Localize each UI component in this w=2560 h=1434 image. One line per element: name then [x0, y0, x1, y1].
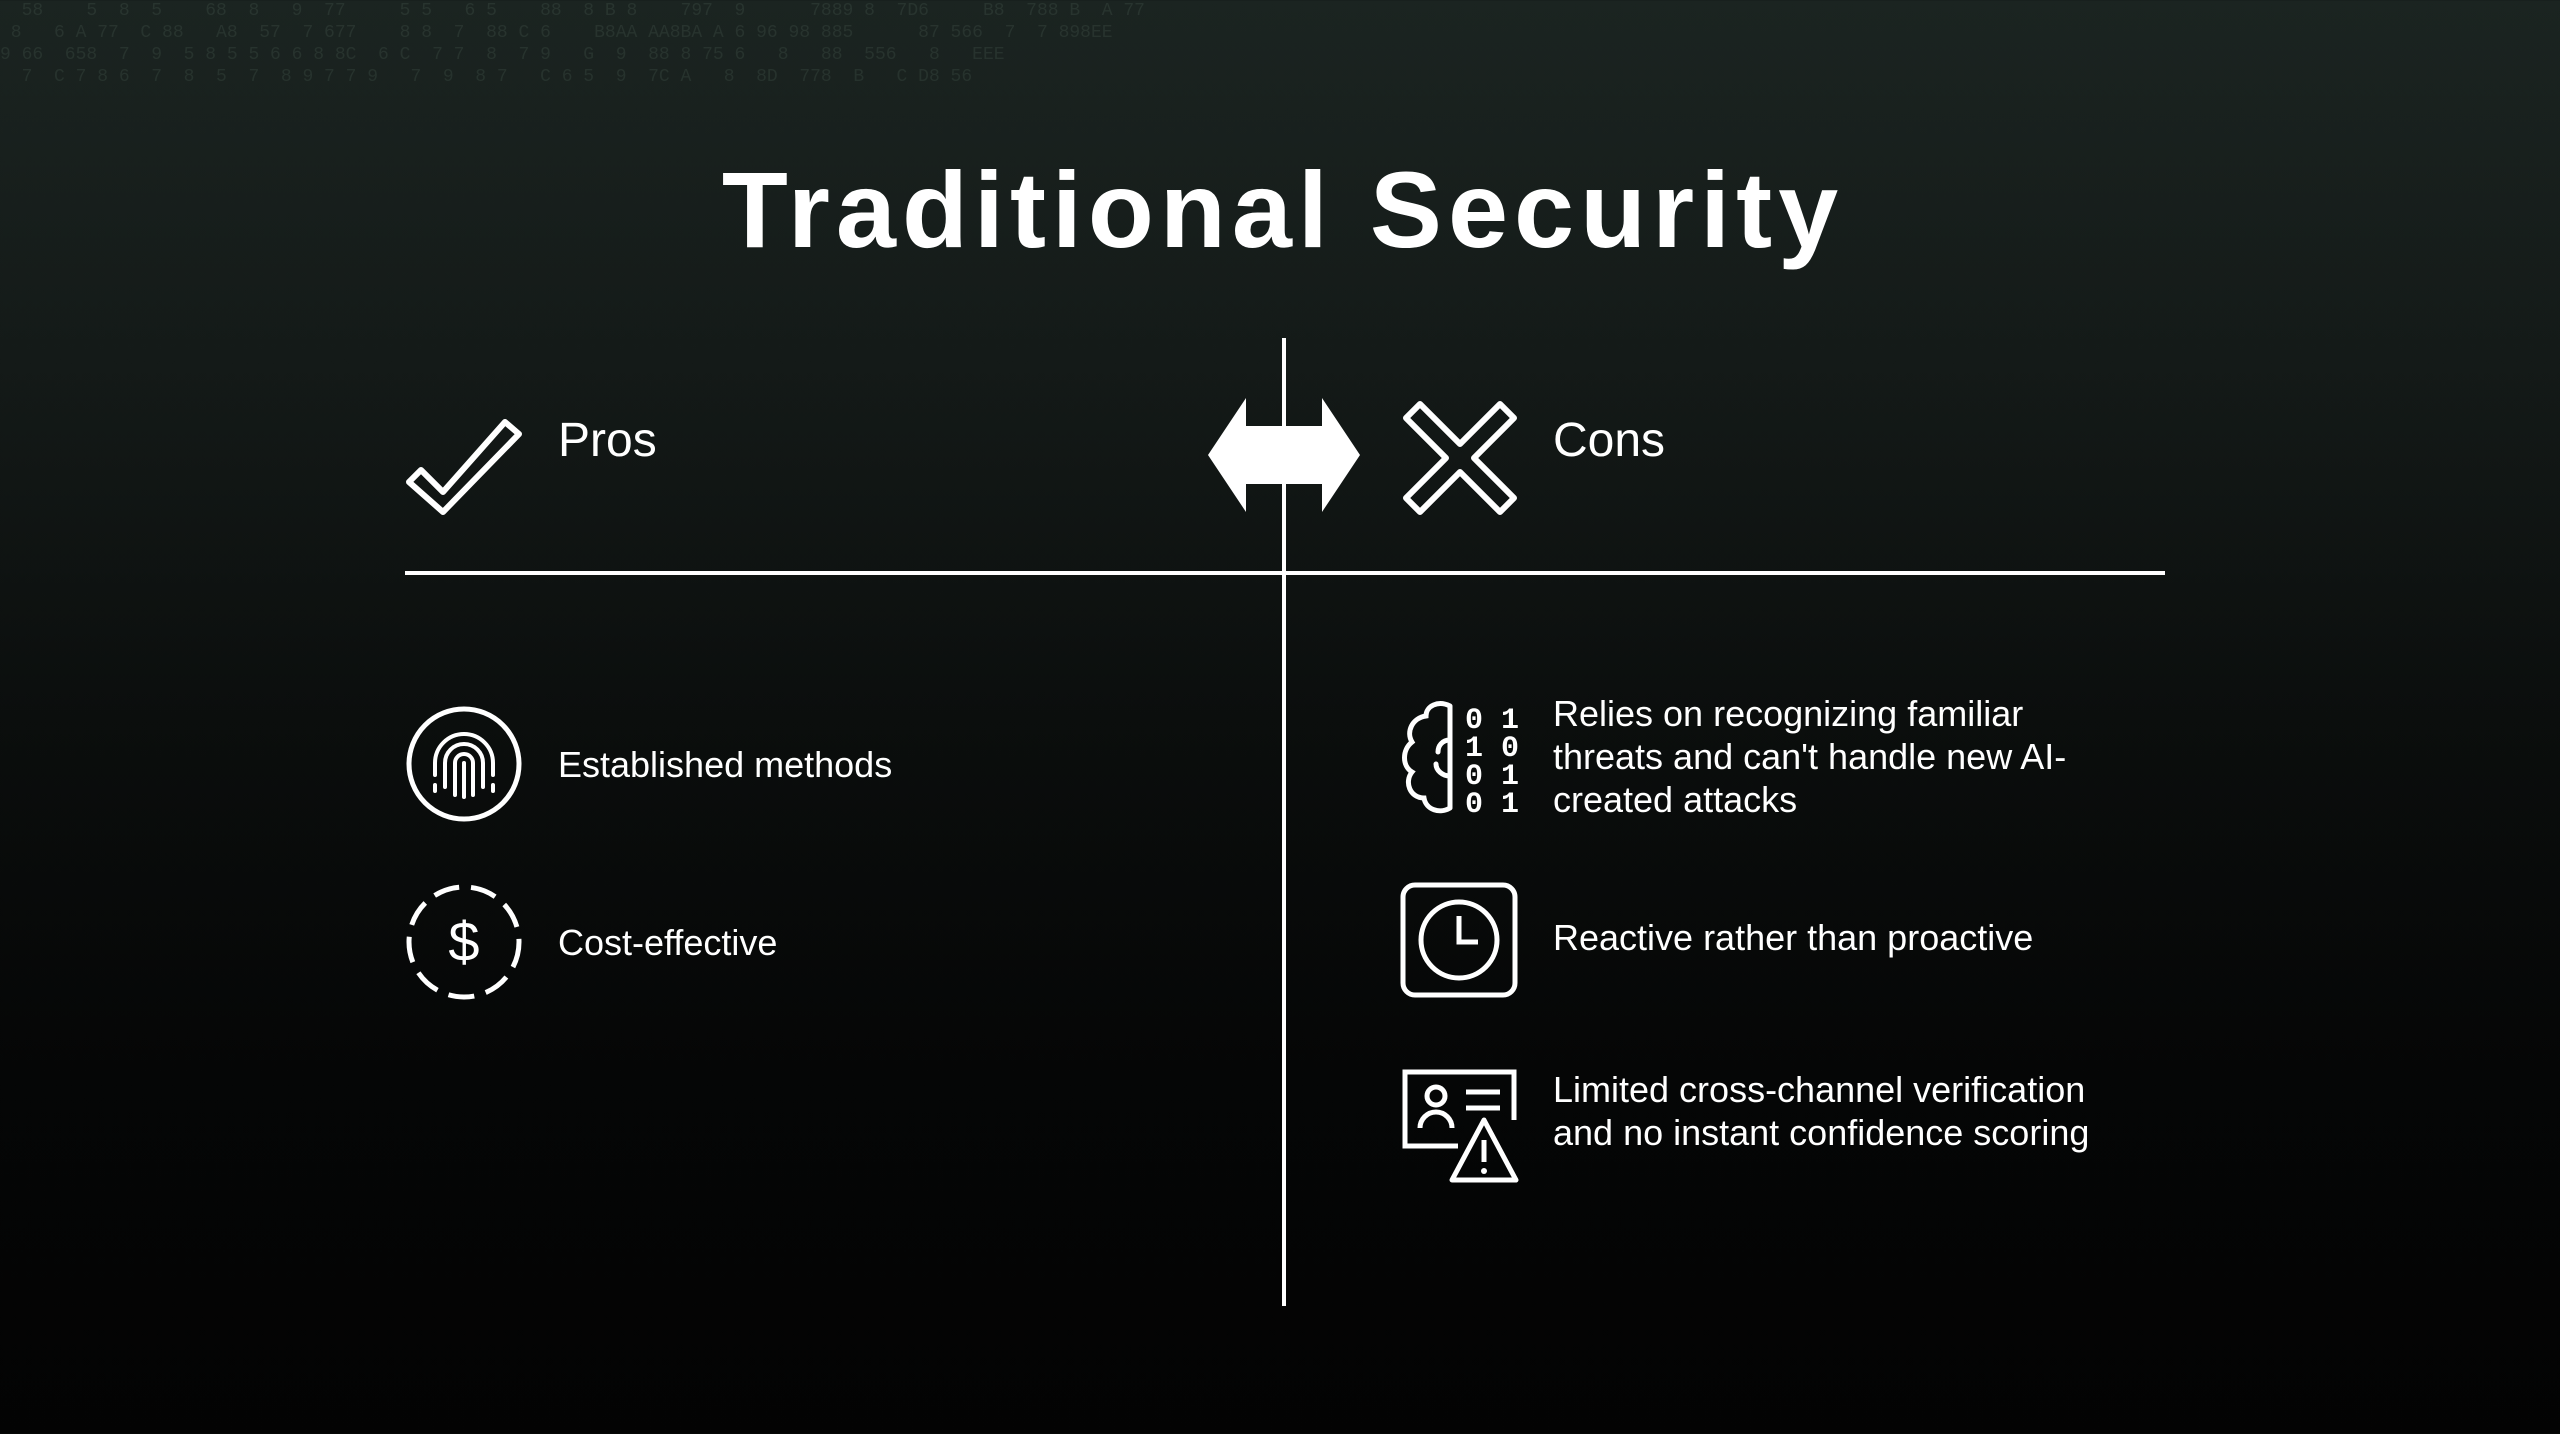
pro item: cost-effective [406, 884, 777, 1000]
text: 58 5 8 5 68 8 9 77 5 5 6 5 88 8 B 8 797 9 7889 8 7D6 B8 788 B A 77 8 6 A 77 C 88 A8 57 7 677 8 8 7 88 C 6 B8AA AA8BA A 6 96 98 885 87 566 7 7 898EE 9 66 658 7 9 5 8 5 5 6 6 8 8C 6 C 7 7 8 7 9 G 9 88 8 75 6 8 88 556 8 EEE 7 C 7 8 6 7 8 5 7 8 9 7 7 9 7 9 8 7 C 6 5 9 7C A 8 8D 778 B C D8 56 [0, 1, 1145, 87]
text: Limited cross-channel verification and no instant confidence scoring [1553, 1069, 2089, 1153]
con item: familiar threats [1402, 693, 2066, 820]
icon: brain binary: 0 1 [1465, 760, 1519, 794]
con item: reactive [1400, 882, 2033, 998]
icon: clock [1400, 882, 1518, 998]
icon: fingerprint [406, 706, 522, 822]
text: Established methods [558, 744, 892, 785]
text: Relies on recognizing familiar threats and can't handle new AI-created attacks [1553, 693, 2066, 820]
icon: dollar: $ [448, 910, 480, 973]
text: Reactive rather than proactive [1553, 917, 2033, 958]
icon: id warning [1402, 1070, 1518, 1182]
icon: brain binary: 1 0 [1465, 732, 1519, 766]
heading: Pros: Pros [558, 414, 657, 467]
icon: dollar [406, 884, 522, 1000]
icon: brain binary: 0 1 [1465, 704, 1519, 738]
con item: cross-channel [1402, 1069, 2089, 1182]
icon: brain binary [1402, 701, 1519, 816]
icon: X [1403, 401, 1517, 515]
title: Traditional Security [722, 149, 1844, 270]
text: Cost-effective [558, 922, 777, 963]
vertical divider [1282, 338, 1286, 1306]
horizontal divider [405, 571, 2165, 575]
icon: check [406, 419, 522, 515]
icon: double arrow [1208, 398, 1360, 512]
pro item: established methods [406, 706, 892, 822]
heading: Cons: Cons [1553, 414, 1665, 467]
